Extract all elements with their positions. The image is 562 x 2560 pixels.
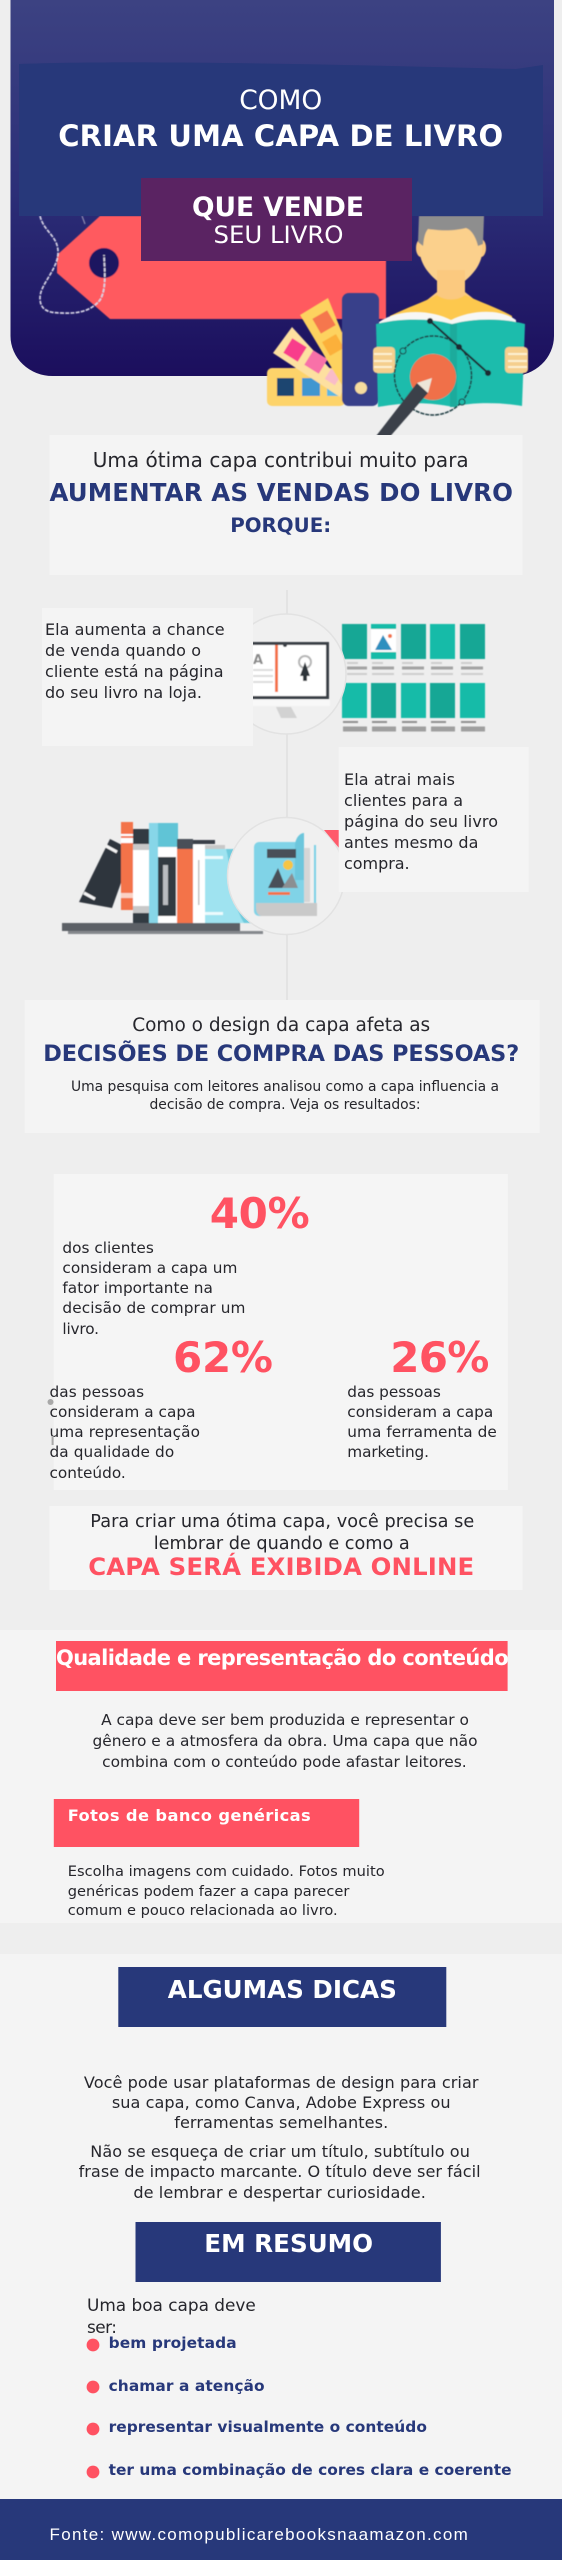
panel: survey results [50, 1174, 508, 1490]
stat: 26%: uma ferramenta de [347, 1423, 497, 1441]
stat: 62% [50, 1333, 273, 1482]
stat: 62%: consideram a capa [50, 1403, 196, 1421]
banner: summary heading [136, 2222, 441, 2282]
stat: 62%: da qualidade do [50, 1443, 174, 1461]
panel: purchase decisions heading: decisão de compra. Veja os resultados: [150, 1097, 420, 1113]
illustration: man holding book [390, 216, 512, 326]
illustration: price tag [40, 216, 386, 319]
text: stock photos description: genéricas podem fazer a capa parecer [68, 1883, 349, 1900]
text: stock photos description: Escolha imagens com cuidado. Fotos muito [68, 1863, 385, 1880]
panel: purchase decisions heading: Como o design da capa afeta as [132, 1015, 430, 1036]
panel: purchase decisions heading: DECISÕES DE COMPRA DAS PESSOAS? [43, 1039, 519, 1067]
illustration: open book with vector circle [373, 312, 528, 440]
banner: quality heading: Qualidade e representação do conteúdo [56, 1646, 509, 1670]
stat: 40%: dos clientes [62, 1239, 154, 1257]
list: summary bullets: representar visualmente o conteúdo [109, 2418, 427, 2436]
panel: intro [49, 435, 522, 575]
text: stock photos description [68, 1863, 385, 1919]
panel: reason 1 [42, 608, 253, 746]
icon: monitor with book cover: A [253, 653, 263, 668]
stat: 62%: 62% [173, 1333, 273, 1382]
banner: tips heading: ALGUMAS DICAS [168, 1975, 397, 2004]
section: tips and summary [0, 1954, 562, 2499]
panel: reason 1: de venda quando o [45, 641, 201, 660]
text: summary intro: ser: [87, 2317, 117, 2337]
text: quality description [92, 1711, 478, 1771]
subtitle box: SEU LIVRO [214, 220, 344, 249]
panel: online display callout [50, 1506, 522, 1590]
panel: online display callout: CAPA SERÁ EXIBIDA ONLINE [88, 1552, 474, 1581]
icon: grid of book covers [342, 624, 485, 729]
banner: stock photos heading: Fotos de banco genéricas [68, 1806, 311, 1825]
text: summary intro: Uma boa capa deve [87, 2295, 256, 2315]
section: content quality [0, 1630, 562, 1923]
list: summary bullets [87, 2334, 512, 2479]
list: summary bullets: bem projetada [109, 2334, 237, 2352]
stat: 62%: conteúdo. [50, 1464, 126, 1482]
icon: red corner marker [324, 830, 339, 848]
banner: tips heading [118, 1967, 446, 2027]
panel: reason 2 [339, 747, 529, 892]
stat: 40%: fator importante na [62, 1279, 213, 1297]
panel: reason 2: compra. [344, 854, 410, 873]
icon: monitor with book cover [240, 643, 330, 718]
panel: purchase decisions heading: Uma pesquisa com leitores analisou como a capa influencia a [71, 1079, 499, 1095]
icon: picture book [254, 833, 317, 916]
panel: reason 2: página do seu livro [344, 812, 498, 831]
panel: online display callout: lembrar de quando e como a [154, 1534, 410, 1554]
banner: summary heading: EM RESUMO [204, 2229, 373, 2258]
stat: 26%: marketing. [347, 1443, 429, 1461]
header banner [10, 0, 554, 440]
panel: reason 1: do seu livro na loja. [45, 683, 202, 702]
panel: reason 1: Ela aumenta a chance [45, 620, 225, 639]
list: summary bullets: ter uma combinação de cores clara e coerente [109, 2461, 512, 2479]
footer: Fonte: www.comopublicarebooksnaamazon.com [50, 2525, 468, 2544]
stat: 26%: das pessoas [347, 1383, 441, 1401]
panel: intro: PORQUE: [230, 514, 331, 537]
panel: intro: AUMENTAR AS VENDAS DO LIVRO [49, 478, 513, 507]
text: tips [79, 2073, 481, 2202]
panel: reason 2: antes mesmo da [344, 833, 478, 852]
circle: book icon backdrop [228, 818, 344, 934]
panel: reason 1: cliente está na página [45, 662, 224, 681]
banner: quality heading [56, 1641, 509, 1691]
stat: 62%: uma representação [50, 1423, 200, 1441]
subtitle box [141, 178, 412, 261]
text: tips: ferramentas semelhantes. [174, 2113, 388, 2132]
stat: 40%: livro. [62, 1320, 99, 1338]
text: quality description: A capa deve ser bem produzida e representar o [101, 1711, 469, 1729]
stat: 62%: das pessoas [50, 1383, 144, 1401]
text: tips: frase de impacto marcante. O título deve ser fácil [79, 2162, 481, 2181]
title panel [19, 62, 543, 216]
text: tips: de lembrar e despertar curiosidade. [133, 2183, 426, 2202]
text: tips: sua capa, como Canva, Adobe Express ou [112, 2093, 451, 2112]
footer [0, 2499, 562, 2560]
stat: 26%: 26% [390, 1333, 489, 1382]
panel: intro: Uma ótima capa contribui muito para [93, 448, 469, 472]
text: quality description: gênero e a atmosfera da obra. Uma capa que não [92, 1732, 478, 1750]
stat: 40%: consideram a capa um [62, 1259, 237, 1277]
text: tips: Não se esqueça de criar um título, subtítulo ou [90, 2142, 470, 2161]
panel: online display callout: Para criar uma ótima capa, você precisa se [90, 1512, 474, 1532]
circle: monitor icon backdrop [226, 614, 346, 734]
stat: 40%: 40% [210, 1189, 310, 1238]
stat: 26%: consideram a capa [347, 1403, 493, 1421]
list: summary bullets: chamar a atenção [109, 2377, 265, 2395]
panel: reason 2: Ela atrai mais [344, 770, 455, 789]
stat: 26% [347, 1333, 497, 1461]
title text: COMO [239, 85, 322, 116]
banner: stock photos heading [54, 1799, 359, 1847]
text: summary intro [87, 2295, 256, 2337]
stat: 40%: decisão de comprar um [62, 1299, 245, 1317]
panel: reason 2: clientes para a [344, 791, 463, 810]
illustration: colour swatches [267, 293, 379, 406]
title text [58, 85, 503, 153]
subtitle box: QUE VENDE [192, 192, 364, 223]
icon: row of books on shelf [62, 822, 263, 934]
panel: purchase decisions heading [25, 1000, 540, 1133]
text: quality description: combina com o conteúdo pode afastar leitores. [102, 1753, 467, 1771]
text: tips: Você pode usar plataformas de design para criar [84, 2073, 479, 2092]
text: stock photos description: comum e pouco relacionada ao livro. [68, 1902, 338, 1919]
title text: CRIAR UMA CAPA DE LIVRO [58, 119, 503, 153]
stat: 40% [62, 1189, 310, 1338]
